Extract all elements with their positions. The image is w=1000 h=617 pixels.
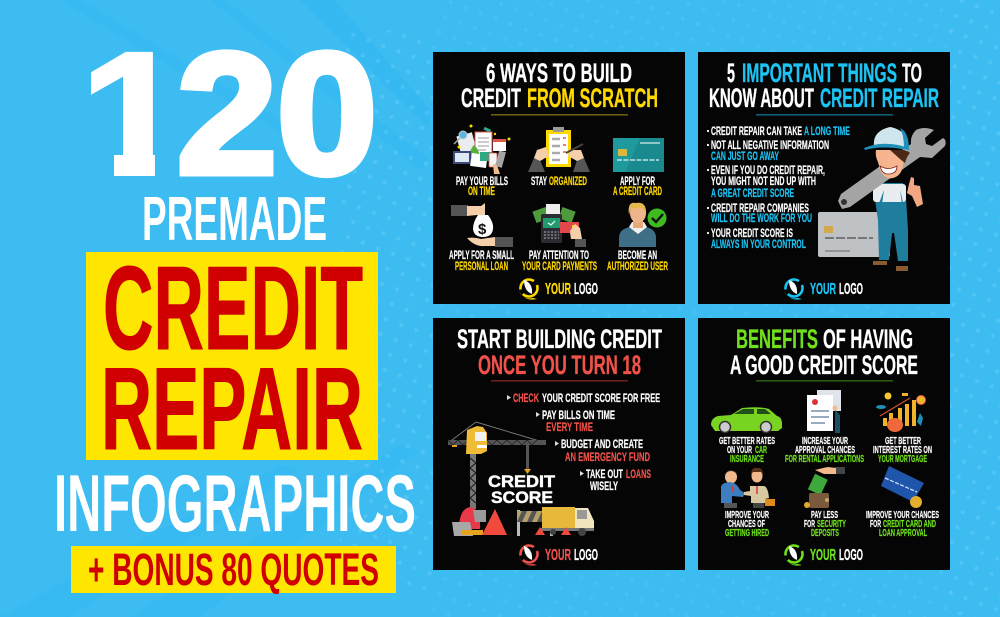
- credit score label: [488, 472, 556, 507]
- icon: blue card and coin: [881, 466, 924, 508]
- yellow credit repair box: CREDIT: [103, 242, 363, 375]
- caption: LOAN APPROVAL: [879, 528, 927, 539]
- caption: GET BETTER: [885, 436, 921, 447]
- icon: authorized user: [619, 203, 666, 247]
- caption: A CREDIT CARD: [613, 186, 662, 198]
- icon: personal loan: [451, 203, 513, 247]
- tips list: YOUR CREDIT SCORE FOR FREE: [542, 391, 660, 405]
- icon: handshake: [721, 468, 775, 508]
- caption: SECURITY: [817, 519, 846, 530]
- bullet list: CREDIT REPAIR CAN TAKE: [711, 124, 802, 138]
- caption: INTEREST RATES ON: [873, 445, 932, 456]
- caption: [449, 250, 514, 273]
- heading: 6 WAYS TO BUILD: [486, 58, 632, 88]
- caption: CAR: [755, 445, 767, 456]
- heading: BENEFITS: [736, 324, 818, 354]
- caption: [613, 176, 662, 198]
- caption: CHANCES OF: [728, 519, 765, 530]
- panel: 5 important things: [698, 52, 950, 304]
- caption: STAY: [531, 176, 547, 188]
- credit score label: CREDIT: [488, 472, 556, 491]
- caption: [456, 176, 508, 198]
- icon: personal loan: $: [478, 221, 487, 238]
- caption: FOR RENTAL APPLICATIONS: [785, 454, 864, 465]
- logo: LOGO: [574, 281, 598, 298]
- bullet list: A LONG TIME: [804, 124, 850, 138]
- caption: [866, 510, 939, 539]
- caption: PAY LESS: [811, 510, 838, 521]
- tips list: EVERY TIME: [546, 420, 593, 434]
- heading: OF HAVING: [823, 324, 913, 354]
- caption: PERSONAL LOAN: [455, 261, 508, 273]
- caption: [719, 436, 775, 465]
- heading: [730, 324, 918, 382]
- icon: credit card: [613, 138, 664, 172]
- caption: YOUR CARD PAYMENTS: [522, 261, 597, 273]
- heading: FROM SCRATCH: [527, 83, 658, 113]
- logo: YOUR: [810, 281, 836, 298]
- caption: PAY YOUR BILLS: [456, 176, 508, 188]
- caption: GETTING HIRED: [725, 528, 769, 539]
- logo: [784, 546, 863, 566]
- caption: FOR: [870, 519, 881, 530]
- tips list: TAKE OUT: [586, 467, 623, 481]
- illustration: crane: [448, 422, 546, 509]
- caption: [725, 510, 769, 539]
- icon: silver credit card: [818, 212, 890, 257]
- yellow credit repair box: [86, 242, 378, 474]
- caption: APPLY FOR A SMALL: [449, 250, 514, 262]
- caption: APPROVAL CHANCES: [795, 445, 855, 456]
- caption: [873, 436, 932, 465]
- tips list: CHECK: [513, 391, 539, 405]
- heading: START BUILDING CREDIT: [457, 324, 662, 354]
- logo: YOUR: [810, 547, 836, 564]
- caption: [785, 436, 864, 465]
- caption: FOR: [804, 519, 815, 530]
- bullet list: ALWAYS IN YOUR CONTROL: [711, 237, 806, 251]
- illustration: construction site: [452, 507, 594, 536]
- caption: INSURANCE: [730, 454, 764, 465]
- bullet list: WILL DO THE WORK FOR YOU: [711, 211, 812, 225]
- heading: [457, 324, 662, 382]
- bullet list: NOT ALL NEGATIVE INFORMATION: [711, 138, 829, 152]
- panel: benefits of a good credit score: [698, 318, 950, 570]
- icon: wallet and money: [804, 467, 845, 508]
- credit score label: SCORE: [491, 488, 553, 507]
- bonus quotes banner: + BONUS 80 QUOTES: [88, 544, 379, 595]
- caption: ON TIME: [468, 186, 495, 198]
- caption: IMPROVE YOUR CHANCES: [866, 510, 939, 521]
- tips list: [507, 391, 660, 493]
- tips list: LOANS: [626, 467, 651, 481]
- icon: clipboard: [528, 127, 590, 172]
- bullet list: A GREAT CREDIT SCORE: [711, 186, 794, 200]
- heading: TO: [902, 58, 922, 88]
- icon: bills: [453, 124, 510, 174]
- yellow credit repair box: REPAIR: [101, 343, 363, 474]
- logo: [519, 280, 598, 300]
- tips list: BUDGET AND CREATE: [561, 437, 643, 451]
- caption: BECOME AN: [618, 250, 657, 262]
- caption: [522, 250, 597, 273]
- caption: INCREASE YOUR: [802, 436, 848, 447]
- caption: IMPROVE YOUR: [725, 510, 769, 521]
- left headline block: [54, 17, 416, 595]
- caption: AUTHORIZED USER: [607, 261, 668, 273]
- heading: ONCE YOU TURN 18: [478, 350, 641, 380]
- caption: ON YOUR: [727, 445, 752, 456]
- icon: mechanic with wrench: [838, 127, 946, 271]
- icon: card terminal: [532, 204, 586, 247]
- icon: rising rates chart: [876, 392, 926, 432]
- logo: [519, 546, 598, 566]
- icon: car: [711, 407, 782, 432]
- bullet list: [707, 124, 850, 251]
- heading: KNOW ABOUT: [709, 83, 814, 113]
- logo: [784, 280, 863, 300]
- heading: [461, 58, 658, 116]
- caption: [531, 176, 587, 188]
- caption: [607, 250, 668, 273]
- big number 120: [91, 49, 374, 178]
- tips list: AN EMERGENCY FUND: [565, 450, 650, 464]
- logo: YOUR: [545, 281, 571, 298]
- panel: 6 ways to build credit: [433, 52, 685, 304]
- caption: APPLY FOR: [620, 176, 655, 188]
- heading: CREDIT: [461, 83, 521, 113]
- caption: CREDIT CARD AND: [883, 519, 936, 530]
- infographics label: INFOGRAPHICS: [54, 459, 416, 549]
- tips list: WISELY: [590, 479, 618, 493]
- logo: LOGO: [839, 547, 863, 564]
- heading: [709, 58, 939, 116]
- caption: GET BETTER RATES: [719, 436, 775, 447]
- big number 120: 20: [177, 18, 377, 210]
- icon: documents: [807, 390, 841, 433]
- premade label: PREMADE: [142, 185, 327, 254]
- panel: start building credit: [433, 318, 685, 570]
- heading: 5: [727, 58, 735, 88]
- bullet list: EVEN IF YOU DO CREDIT REPAIR,: [711, 163, 825, 177]
- bullet list: CREDIT REPAIR COMPANIES: [711, 201, 809, 215]
- tips list: PAY BILLS ON TIME: [542, 408, 615, 422]
- bonus quotes banner: [71, 544, 396, 595]
- logo: LOGO: [839, 281, 863, 298]
- big number 120: 1: [80, 17, 187, 213]
- bullet list: YOU MIGHT NOT END UP WITH: [711, 174, 816, 188]
- caption: ORGANIZED: [549, 176, 587, 188]
- logo: LOGO: [574, 547, 598, 564]
- bullet list: YOUR CREDIT SCORE IS: [711, 226, 793, 240]
- logo: YOUR: [545, 547, 571, 564]
- caption: YOUR MORTGAGE: [878, 454, 927, 465]
- caption: DEPOSITS: [811, 528, 839, 539]
- caption: [804, 510, 846, 539]
- bullet list: CAN JUST GO AWAY: [711, 149, 779, 163]
- caption: PAY ATTENTION TO: [529, 250, 589, 262]
